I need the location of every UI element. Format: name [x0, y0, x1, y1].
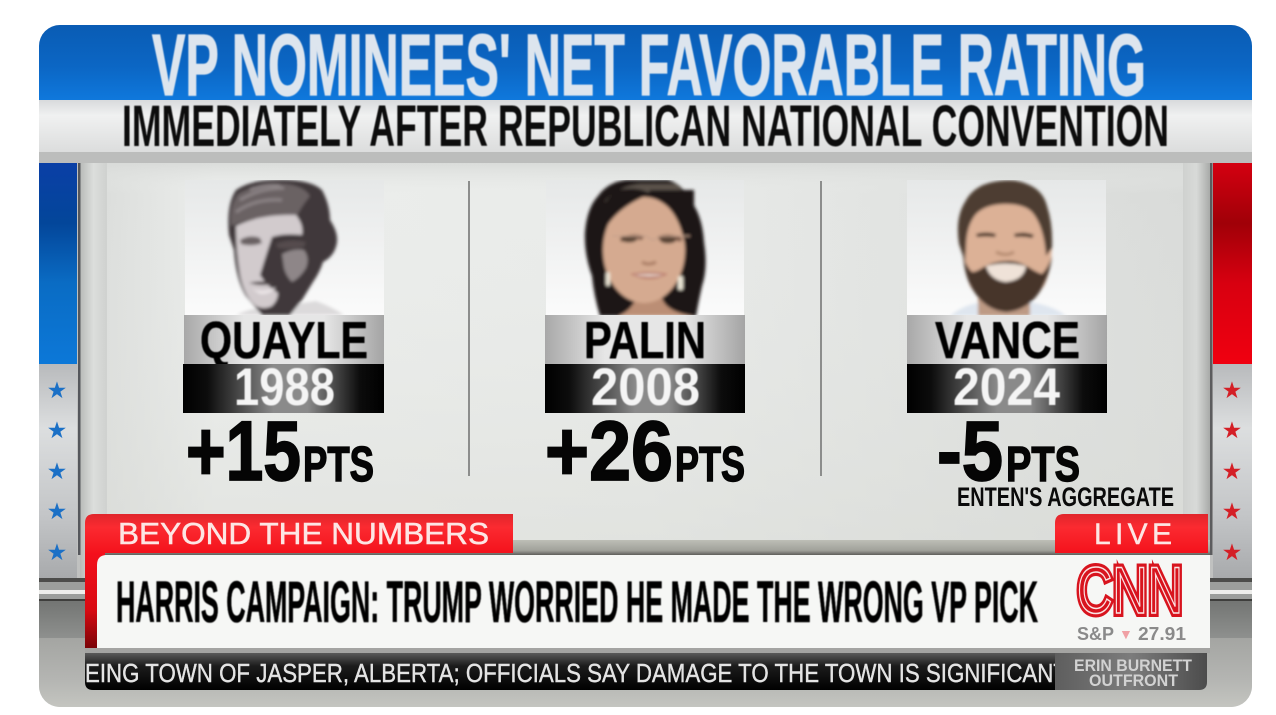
ticker bar — [85, 653, 1055, 690]
name: Quayle: QUAYLE — [200, 312, 368, 370]
blue stars: ★ — [48, 380, 66, 402]
photo: Vance — [907, 180, 1106, 316]
panel: right red column — [1213, 163, 1252, 364]
year: 1988: 1988 — [234, 358, 335, 417]
year band: 2008 — [545, 364, 745, 413]
logo: CNN: CNN — [1077, 553, 1183, 627]
name band: Vance — [907, 315, 1107, 364]
ticker text: EING TOWN OF JASPER, ALBERTA; OFFICIALS SAY DAMAGE TO THE TOWN IS SIGNIFICANT — [85, 658, 1067, 688]
left frame post — [78, 163, 80, 555]
year: 2008: 2008 — [591, 358, 700, 417]
panel: Vance column — [907, 180, 1174, 512]
market ticker: 27.91 — [1138, 624, 1186, 644]
panel: blue title banner — [39, 25, 1252, 100]
live label: LIVE — [1094, 518, 1172, 551]
unit: PTS: PTS — [1006, 438, 1080, 492]
name band: Quayle — [184, 315, 384, 364]
show name: ERIN BURNETT — [1074, 656, 1193, 675]
name band: Palin — [545, 315, 745, 364]
lower third: red side strip — [85, 553, 105, 648]
blue stars: ★ — [48, 542, 66, 564]
unit: PTS: PTS — [303, 438, 374, 492]
floor rail — [39, 582, 1252, 599]
decorative shelf under subtitle — [39, 152, 1252, 163]
show name box — [1055, 653, 1207, 690]
panel: left star column — [39, 386, 77, 578]
unit: PTS: PTS — [675, 438, 745, 492]
show name — [1074, 656, 1193, 690]
panel: left blue column — [39, 163, 77, 364]
market ticker — [1077, 624, 1186, 644]
column divider 1 — [468, 181, 470, 476]
blue stars — [48, 380, 66, 564]
source note: ENTEN'S AGGREGATE — [957, 482, 1174, 512]
value: -5: -5 — [937, 404, 1003, 498]
panel: right star column — [1213, 386, 1252, 578]
blue stars: ★ — [48, 420, 66, 442]
red stars: ★ — [1223, 501, 1241, 523]
stage shading — [144, 163, 906, 540]
market ticker: ▼ — [1119, 626, 1133, 642]
panel: white subtitle band — [39, 100, 1252, 152]
show name: OUTFRONT — [1089, 671, 1179, 690]
red stars: ★ — [1223, 380, 1241, 402]
red stars: ★ — [1223, 420, 1241, 442]
blue stars: ★ — [48, 501, 66, 523]
logo: CNN: CNN — [1077, 553, 1183, 627]
lower third: white band — [97, 555, 1210, 648]
name: Vance: VANCE — [935, 312, 1080, 370]
right frame face — [1183, 163, 1210, 578]
blue stars: ★ — [48, 461, 66, 483]
value: +15: +15 — [186, 404, 301, 498]
red stars — [1223, 380, 1241, 564]
year: 2024: 2024 — [953, 358, 1060, 417]
right frame post — [1210, 163, 1212, 555]
value: +26: +26 — [545, 404, 673, 498]
left frame face — [86, 163, 107, 518]
panel: central stage — [107, 163, 1183, 543]
floor wall — [39, 601, 1252, 638]
name: Palin: PALIN — [584, 312, 706, 370]
red stars: ★ — [1223, 461, 1241, 483]
stage lower ledge — [85, 540, 1210, 555]
photo: Quayle — [185, 180, 384, 315]
rail highlight — [39, 590, 1252, 594]
red stars: ★ — [1223, 542, 1241, 564]
year band: 1988 — [183, 364, 384, 413]
market ticker: S&P — [1077, 624, 1114, 644]
lower third: tab text: BEYOND THE NUMBERS — [118, 516, 489, 551]
wall edge — [39, 599, 1252, 601]
live tab — [1055, 514, 1208, 553]
panel: Quayle column — [183, 180, 384, 498]
year band: 2024 — [907, 364, 1107, 413]
floor — [39, 638, 1252, 707]
column divider 2 — [820, 181, 822, 476]
panel: Palin column — [545, 180, 745, 498]
ticker edge shadow — [85, 648, 1210, 653]
rail shadow — [39, 578, 1252, 582]
lower third: red tab — [85, 514, 513, 553]
photo: Palin — [546, 180, 744, 316]
